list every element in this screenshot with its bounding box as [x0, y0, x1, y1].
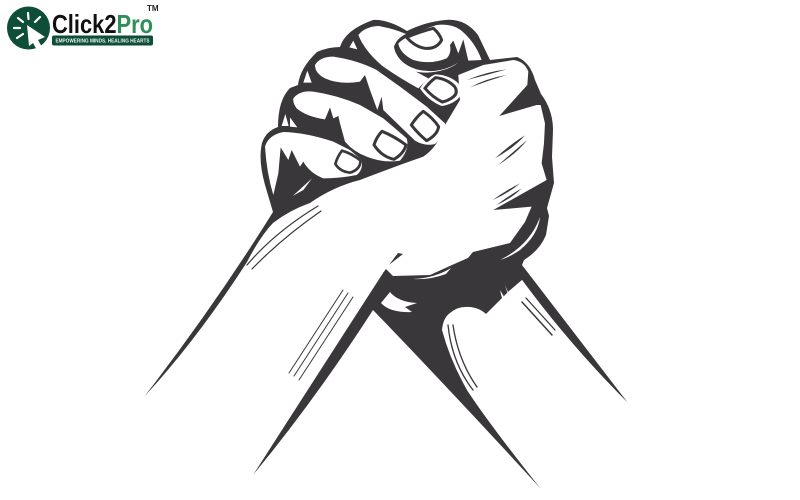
palm lower edge slivers — [413, 268, 451, 279]
fingernail: third finger — [411, 111, 439, 141]
finger: lowest — [265, 132, 362, 195]
logo: Click2Pro — [7, 4, 159, 50]
logo tagline bar — [52, 36, 153, 46]
fingernail: lowest finger — [335, 151, 361, 173]
trademark: TM — [147, 4, 159, 13]
main hand palm and left forearm — [144, 60, 547, 475]
finger: top — [358, 26, 428, 88]
thumbnail — [407, 28, 442, 48]
thumb lower sliver — [393, 45, 458, 73]
fingernail: top finger — [420, 74, 461, 106]
finger: third — [315, 57, 445, 145]
icon: cursor badge — [7, 6, 50, 50]
logo tagline bar: EMPOWERING MINDS, HEALING HEARTS — [56, 38, 150, 44]
left forearm creases — [247, 206, 353, 380]
right forearm — [442, 280, 628, 500]
dark silhouette of fist and arms — [144, 20, 628, 489]
dark band highlights — [381, 290, 511, 324]
illustration: clasped arm wrestling hands — [144, 20, 628, 500]
thumb — [398, 25, 482, 62]
fingernail: second finger — [374, 131, 406, 159]
logo wordmark: Click2Pro — [52, 9, 153, 39]
knuckle slivers — [282, 41, 357, 196]
right forearm creases — [448, 298, 555, 390]
fingers and thumb of the fist — [265, 25, 482, 196]
finger: second — [293, 91, 407, 161]
palm crease marks — [467, 69, 527, 205]
